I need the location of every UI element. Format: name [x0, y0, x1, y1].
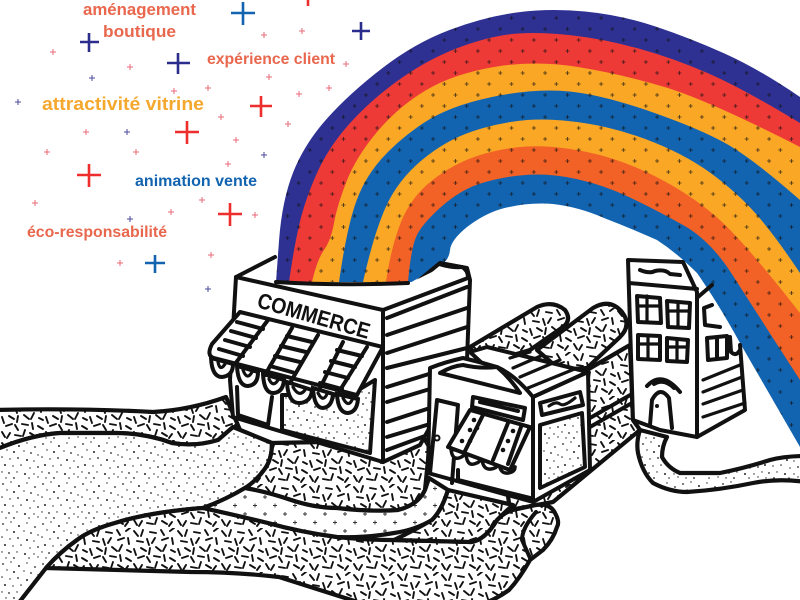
right face window	[540, 413, 585, 488]
awning stripes	[219, 322, 362, 389]
base line of rainbow	[276, 282, 408, 284]
right face sign	[540, 392, 583, 415]
text label: boutique: boutique	[103, 22, 176, 41]
thumb nail	[522, 512, 536, 558]
awning scallops	[451, 449, 515, 473]
door knob	[655, 404, 659, 408]
front wall	[230, 277, 383, 462]
top face	[236, 257, 468, 310]
lower finger and thumb	[46, 505, 558, 600]
top outline	[236, 257, 468, 310]
top cornice	[629, 283, 697, 289]
plus-sign sparkles	[15, 0, 370, 292]
rainbow arch	[276, 10, 800, 447]
text label: éco-responsabilité: éco-responsabilité	[27, 224, 167, 241]
palm right side	[500, 345, 640, 510]
front wall	[628, 260, 697, 437]
sign board	[472, 397, 525, 420]
sign squiggle	[640, 270, 680, 275]
small shop	[428, 347, 590, 502]
text label: aménagement: aménagement	[83, 0, 196, 19]
finger two	[537, 304, 627, 370]
shop sign: COMMERCE	[255, 288, 373, 344]
finger one	[470, 304, 568, 365]
windows	[637, 296, 690, 362]
sleeve upper band	[0, 397, 240, 450]
shop window	[282, 380, 375, 453]
roof ornament	[440, 365, 520, 393]
scallop inner marks	[218, 362, 352, 404]
door knob	[434, 436, 440, 440]
awning	[448, 410, 530, 470]
awning scallops	[211, 358, 358, 413]
awning dots	[460, 418, 515, 452]
text label: attractivité vitrine: attractivité vitrine	[42, 93, 204, 114]
door	[237, 387, 272, 425]
top stripes face	[470, 347, 588, 397]
door with arch	[647, 379, 680, 428]
hand with patterned sleeve and fingers	[0, 304, 640, 600]
palm crease	[590, 394, 632, 427]
text label: animation vente: animation vente	[135, 173, 257, 190]
side wall stripes	[387, 287, 467, 450]
door	[430, 400, 458, 483]
dotted finger band	[203, 478, 448, 537]
main shop COMMERCE	[209, 257, 470, 462]
awning panels	[209, 312, 383, 395]
front face	[428, 358, 533, 502]
side wall	[383, 263, 470, 462]
stippled path to building	[637, 430, 800, 492]
side stripes	[703, 365, 745, 417]
confetti band under shop	[245, 440, 430, 511]
tall building	[628, 260, 745, 437]
stippled wrist area	[0, 427, 272, 600]
lower window frame	[458, 470, 530, 498]
confetti between fingers	[394, 490, 513, 542]
side wall	[697, 285, 745, 437]
text label: expérience client: expérience client	[207, 51, 336, 68]
side windows	[704, 305, 740, 360]
right face	[533, 372, 590, 502]
